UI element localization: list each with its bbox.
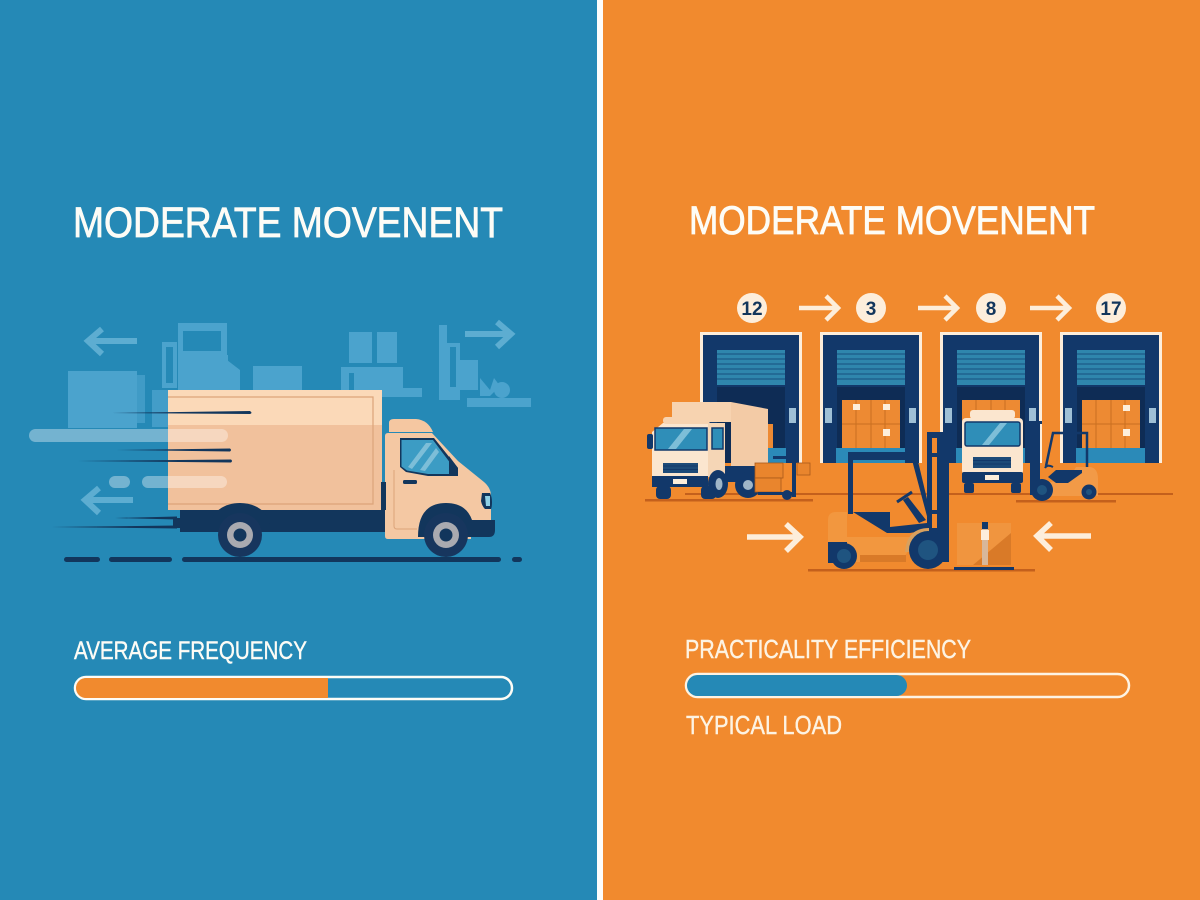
arrow [799,296,838,320]
chassis [173,510,386,532]
label: typical load: TYPICAL LOAD [686,710,842,740]
icon: strapped box [954,522,1014,570]
number 12 [737,293,767,323]
dock door 3 [940,332,1042,463]
label: practicality efficiency: PRACTICALITY EFFICIENCY [685,634,971,664]
cargo box [168,390,382,510]
title: right: MODERATE MOVENENT [689,199,1095,243]
dock door 2 [820,332,922,463]
icon: arrow left [1037,523,1091,550]
number 12: 12 [741,299,763,320]
background silhouettes: warehouse [68,323,531,428]
illustration: side truck [647,402,768,499]
dock door 1 [700,332,802,463]
number 8: 8 [986,299,996,320]
cab [381,419,495,557]
arrow [918,296,957,320]
label: average frequency: AVERAGE FREQUENCY [74,637,307,665]
icon: arrow top right [465,322,511,347]
number 17: 17 [1100,299,1122,320]
number 3: 3 [866,299,876,320]
speed lines [52,411,252,528]
progress bar: average frequency [75,677,512,699]
illustration: large forklift [828,432,949,569]
icon: arrow top left [88,329,137,354]
step numbers and arrows [737,293,1126,323]
icon: arrow lower left [85,488,133,513]
number 3 [856,293,886,323]
road [64,557,522,562]
motion bars [29,429,228,488]
icon: arrow right [747,524,800,551]
number 17 [1096,293,1126,323]
illustration: front truck [962,410,1023,493]
illustration: delivery truck [29,390,522,562]
panel: orange background [603,0,1200,900]
progress bar: practicality efficiency [686,674,1129,697]
title: left: MODERATE MOVENENT [73,199,503,247]
rear wheel [210,503,270,557]
number 8 [976,293,1006,323]
arrow [1030,296,1069,320]
ground lines [645,493,1173,572]
divider [597,0,603,900]
illustration: small forklift [1026,421,1098,501]
illustration: pallet jack with boxes [755,450,810,500]
dock door 4 [1060,332,1162,463]
panel: blue background [0,0,597,900]
